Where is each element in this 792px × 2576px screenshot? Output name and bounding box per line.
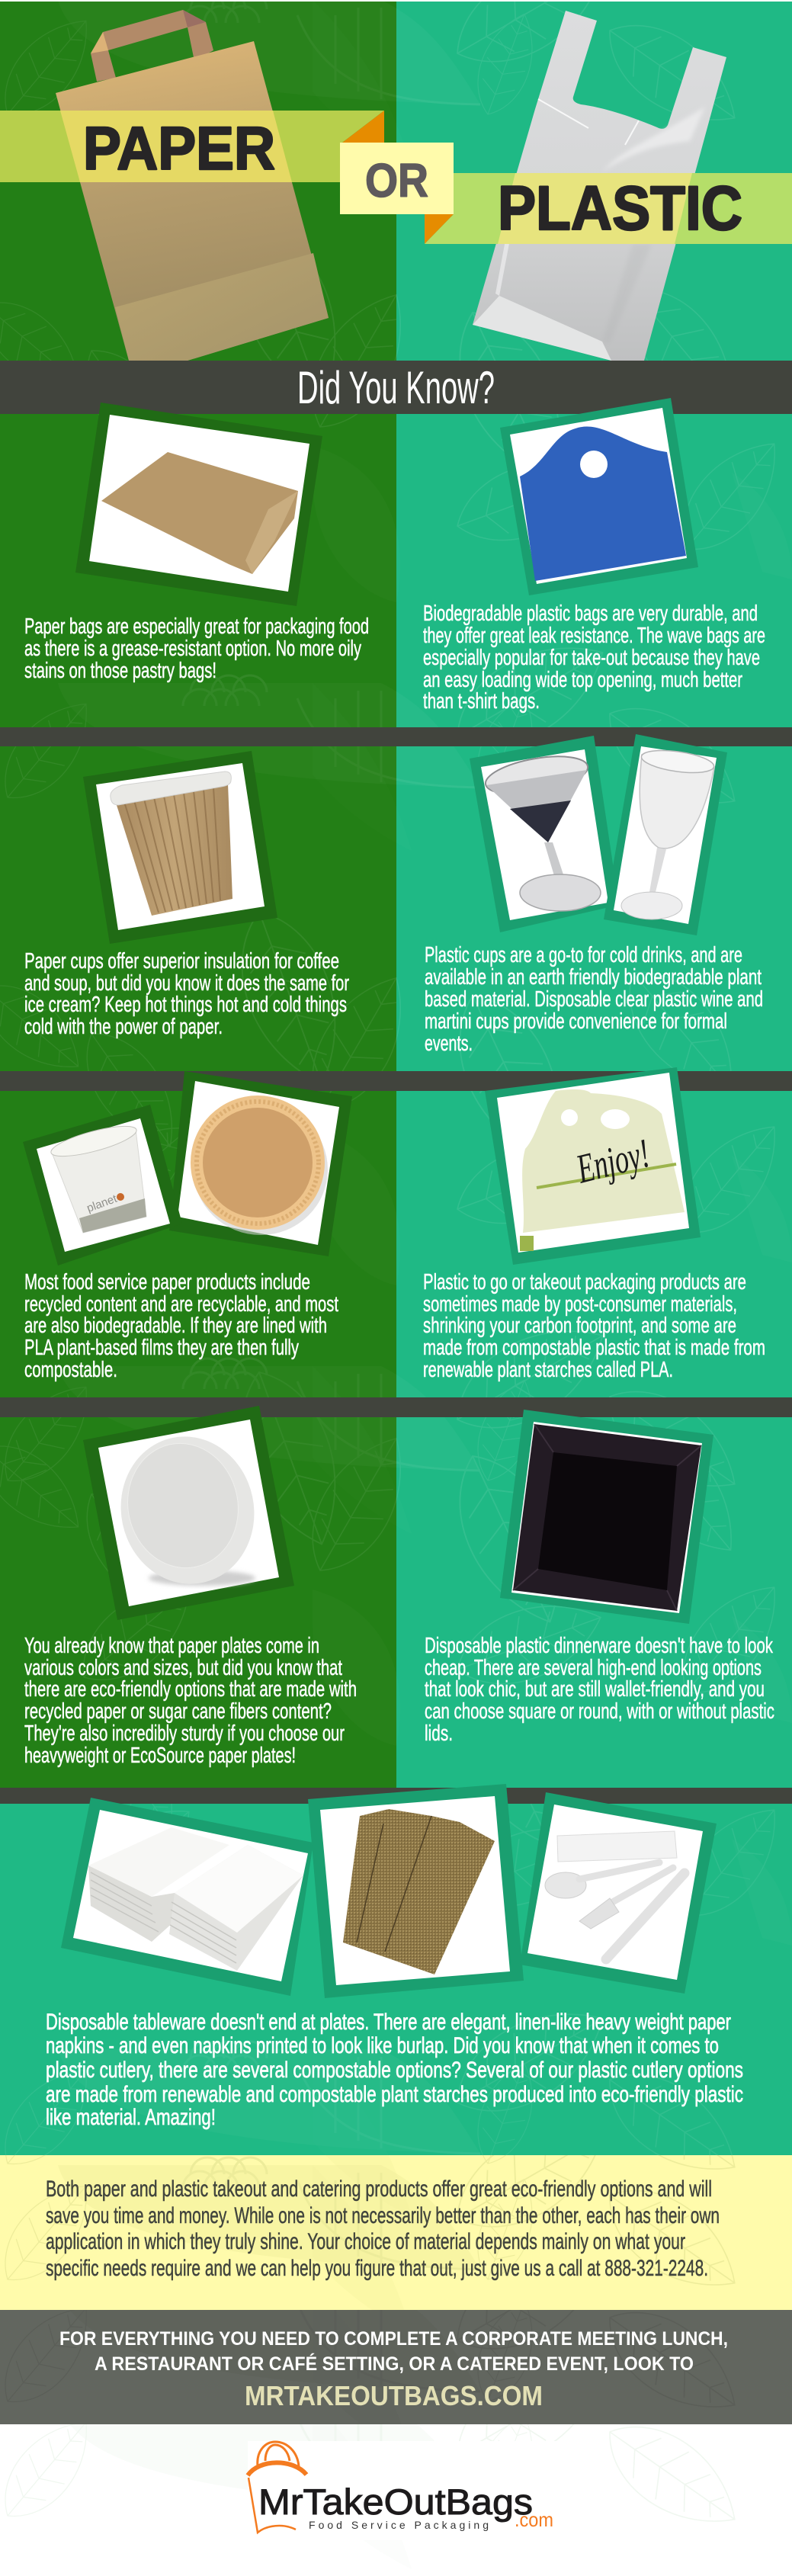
text: recycled paper products: PLA plant-based films they are then fully [24,1336,299,1360]
panel: plastic bags [423,398,765,714]
photo: ripple paper cup [83,751,277,944]
text: plastic takeout packaging: renewable plant starches called PLA. [423,1358,673,1382]
photo: paper plate [169,1071,352,1256]
panel: hero title [0,10,792,361]
text: plastic bags: than t-shirt bags. [423,689,540,714]
photo: burlap napkins [308,1784,524,1998]
panel: paper bags [24,403,369,683]
text: conclusion [46,2177,720,2281]
OR badge: OR [365,155,428,207]
text: paper plates: there are eco-friendly options that are made with [24,1677,357,1702]
icon: paper bag [56,10,329,361]
title: PLASTIC: PLASTIC [498,174,742,243]
photo: black square plate [500,1410,713,1624]
divider bars [0,727,792,1804]
photo: planet paper cup [23,1105,182,1266]
text: recycled paper products: recycled content and are recyclable, and most [24,1292,338,1317]
heading bar: Did You Know? [0,361,792,414]
panel: paper plates [24,1406,357,1768]
text: paper plates: They're also incredibly sturdy if you choose our [24,1721,345,1746]
photo: white napkins [61,1798,313,1996]
paper ribbon [0,111,384,182]
panel: plastic cups [425,734,763,1056]
text: paper plates: You already know that paper plates come in [24,1634,319,1658]
photo: Enjoy takeout bag [485,1067,701,1265]
text: paper plates [24,1634,357,1768]
panel: plastic dinnerware [425,1410,774,1746]
text: paper cups: cold with the power of paper. [24,1015,223,1039]
photo: Enjoy takeout bag: Enjoy! [572,1130,654,1192]
callout: website: FOR EVERYTHING YOU NEED TO COMPLETE A CORPORATE MEETING LUNCH, [59,2328,728,2350]
callout: website: A RESTAURANT OR CAFÉ SETTING, OR A CATERED EVENT, LOOK TO [95,2353,694,2375]
logo: MrTakeOutBags: .com [515,2508,553,2531]
photo: blue wave bag [500,398,698,595]
logo: MrTakeOutBags: Food Service Packaging [309,2519,489,2531]
text: plastic dinnerware [425,1634,774,1746]
text: recycled paper products [24,1270,338,1382]
text: napkins and cutlery [46,2010,743,2130]
text: paper plates: various colors and sizes, but did you know that [24,1656,342,1680]
callout: website: MRTAKEOUTBAGS.COM [245,2380,543,2411]
text: recycled paper products: Most food service paper products include [24,1270,310,1294]
photo: compostable cutlery [520,1792,717,1994]
text: recycled paper products: are also biodegradable. If they are lined with [24,1314,327,1338]
heading bar: Did You Know?: Did You Know? [297,362,495,413]
title: PAPER: PAPER [83,114,275,182]
panel: plastic takeout packaging [423,1067,765,1382]
text: recycled paper products: compostable. [24,1358,117,1382]
panel: recycled paper products [23,1071,352,1382]
photo: martini cup [470,736,619,932]
text: paper plates: recycled paper or sugar cane fibers content? [24,1699,332,1724]
text: paper bags [24,614,369,683]
photo: white paper plate [83,1406,294,1620]
text: plastic bags [423,601,765,714]
text: paper cups: and soup, but did you know it does the same for [24,971,349,996]
icon: plastic bag [473,11,726,361]
text: paper bags: as there is a grease-resistant option. No more oily [24,637,361,661]
text: plastic cups [425,943,763,1056]
photo: kraft pastry bag [75,403,322,606]
text: paper cups: ice cream? Keep hot things hot and cold things [24,993,347,1017]
text: paper bags: Paper bags are especially great for packaging food [24,614,369,639]
text: plastic cups: events. [425,1031,473,1056]
text: paper bags: stains on those pastry bags! [24,659,216,683]
OR badge [340,143,454,214]
logo: MrTakeOutBags: MrTakeOutBags [258,2481,533,2522]
text: paper plates: heavyweight or EcoSource paper plates! [24,1744,296,1768]
callout: website [59,2328,728,2411]
photo: wine cup [604,734,727,935]
photo: planet paper cup: planet [85,1192,120,1215]
plastic ribbon [425,173,792,244]
panel: napkins and cutlery [46,1784,743,2130]
logo: MrTakeOutBags [248,2442,553,2533]
text: paper cups [24,949,349,1039]
text: plastic dinnerware: lids. [425,1721,453,1746]
text: napkins and cutlery: like material. Amazing! [46,2105,216,2130]
text: plastic takeout packaging [423,1270,765,1382]
panel: paper cups [24,751,349,1039]
text: paper cups: Paper cups offer superior insulation for coffee [24,949,339,974]
